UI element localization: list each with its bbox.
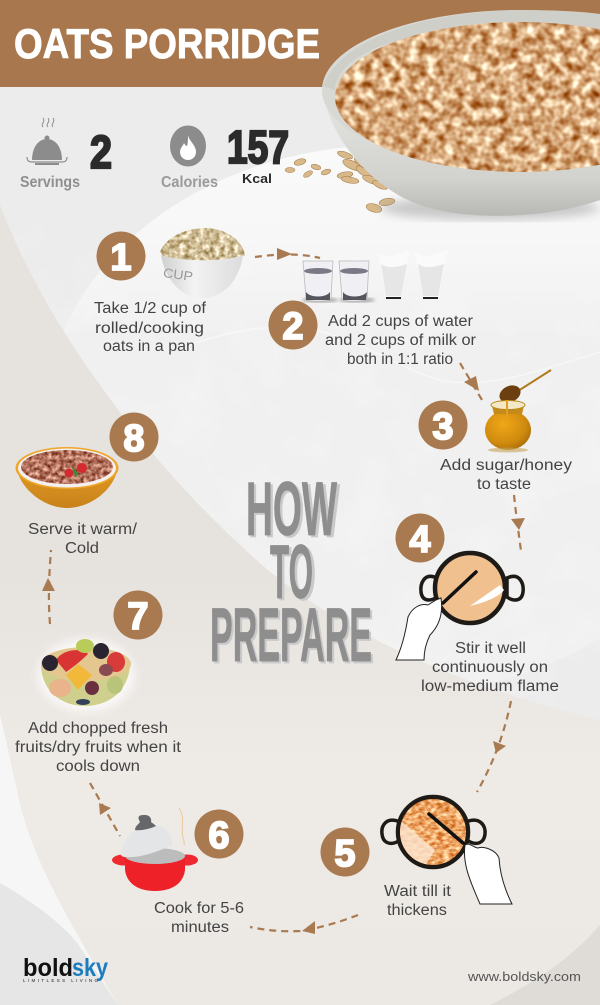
oats porridge bowl: [322, 10, 600, 220]
servings block: [20, 118, 112, 191]
icon: served porridge bowl: [16, 447, 118, 508]
number badge 7: 7: [127, 596, 149, 638]
number badge 2: [268, 300, 318, 350]
step 1 text: [94, 300, 207, 355]
calories value: 157: [227, 121, 289, 173]
label: calories: Calories: [161, 174, 218, 191]
arrow 6 to 7: [90, 783, 120, 836]
number badge 7: [114, 590, 162, 640]
step 2 text: and 2 cups of milk or: [325, 332, 476, 349]
icon: water glasses: [302, 261, 375, 302]
number badge 6: 6: [208, 815, 230, 857]
number badge 4: 4: [409, 519, 431, 561]
number badge 4: [396, 514, 444, 562]
arrow 4 to 5: [477, 701, 511, 792]
unit: Kcal: [242, 171, 272, 186]
step 7 text: fruits/dry fruits when it: [15, 739, 182, 756]
step 8 text: Cold: [65, 540, 99, 557]
step 4 text: low-medium flame: [421, 678, 559, 695]
arrow 2 to 3: [460, 363, 482, 400]
icon: cup of oats: CUP: [162, 265, 194, 284]
icon: milk glasses: [376, 250, 449, 298]
step 1: [94, 226, 248, 355]
logo: boldsky: bold: [23, 954, 73, 982]
step 7 text: Add chopped fresh: [28, 720, 168, 737]
step 6 text: [154, 900, 244, 936]
step 3 text: to taste: [477, 476, 531, 493]
step 4 text: [421, 640, 559, 695]
white plate: [45, 145, 600, 695]
number badge 3: 3: [432, 406, 454, 448]
step 2: [268, 250, 476, 368]
step 4 text: Stir it well: [455, 640, 526, 657]
step 5 text: thickens: [387, 902, 447, 919]
website url: www.boldsky.com: [467, 969, 581, 984]
icon: red pot: [112, 808, 198, 891]
icon: thickening pan: [382, 797, 512, 904]
number badge 8: 8: [123, 418, 145, 460]
how to prepare heading: TO: [272, 532, 316, 617]
step 3 text: [440, 457, 572, 493]
step 2 text: Add 2 cups of water: [328, 313, 473, 330]
step 5 text: [384, 883, 452, 919]
step 3: [418, 370, 572, 493]
logo: boldsky: [23, 954, 108, 983]
step 7: [15, 590, 182, 775]
step 8 text: Serve it warm/: [28, 521, 138, 538]
servings value: 2: [90, 126, 112, 178]
icon: flame: [170, 126, 206, 166]
step 8 text: [28, 521, 138, 557]
number badge 2: 2: [282, 306, 304, 348]
text: PREPARE: [210, 593, 372, 678]
label: servings: Servings: [20, 174, 80, 191]
icon: fruit bowl: [38, 639, 134, 711]
icon: stirring pan: [396, 553, 523, 660]
number badge 1: 1: [110, 237, 132, 279]
arrow 7 to 8: [42, 550, 55, 624]
how to prepare heading: HOW: [248, 469, 340, 554]
icon: honey jar: [485, 370, 551, 452]
icon: cloche: [27, 118, 67, 165]
text: PREPARE: [212, 595, 374, 680]
step 6: [112, 808, 244, 936]
title banner: [0, 0, 600, 87]
how to prepare heading: HOW: [246, 467, 337, 552]
step 1 text: Take 1/2 cup of: [94, 300, 207, 317]
icon: cup of oats: [160, 228, 245, 296]
white and grey lower-left corner: [0, 715, 118, 1005]
how to prepare heading: [210, 467, 374, 680]
arrow 3 to 4: [511, 495, 525, 551]
arrow 5 to 6: [250, 915, 358, 934]
number badge 1: [96, 232, 146, 280]
step 6 text: Cook for 5-6: [154, 900, 244, 917]
how to prepare heading: TO: [270, 530, 313, 615]
title: OATS PORRIDGE: [14, 20, 320, 67]
step 7 text: [15, 720, 182, 775]
logo: boldsky: sky: [72, 954, 108, 982]
step 3 text: Add sugar/honey: [440, 457, 572, 474]
number badge 3: [418, 400, 468, 450]
logo: boldsky: LIMITLESS LIVING: [23, 978, 98, 983]
step 5 text: Wait till it: [384, 883, 452, 900]
number badge 5: [320, 828, 370, 876]
arrow 1 to 2: [255, 248, 320, 260]
step 2 text: both in 1:1 ratio: [347, 351, 453, 368]
step 5: [320, 797, 512, 919]
number badge 5: 5: [334, 833, 356, 875]
bottom right corner shade: [490, 925, 600, 1005]
beige lower region: [0, 205, 600, 1005]
number badge 8: [110, 412, 158, 462]
scattered oat flakes: [285, 144, 395, 214]
step 8: [16, 412, 158, 557]
step 1 text: rolled/cooking: [95, 320, 204, 337]
step 4 text: continuously on: [432, 659, 548, 676]
step 2 text: [325, 313, 476, 368]
calories block: [161, 121, 289, 191]
step 1 text: oats in a pan: [103, 338, 195, 355]
step 7 text: cools down: [56, 758, 140, 775]
step 6 text: minutes: [171, 919, 229, 936]
step 4: [396, 514, 559, 695]
